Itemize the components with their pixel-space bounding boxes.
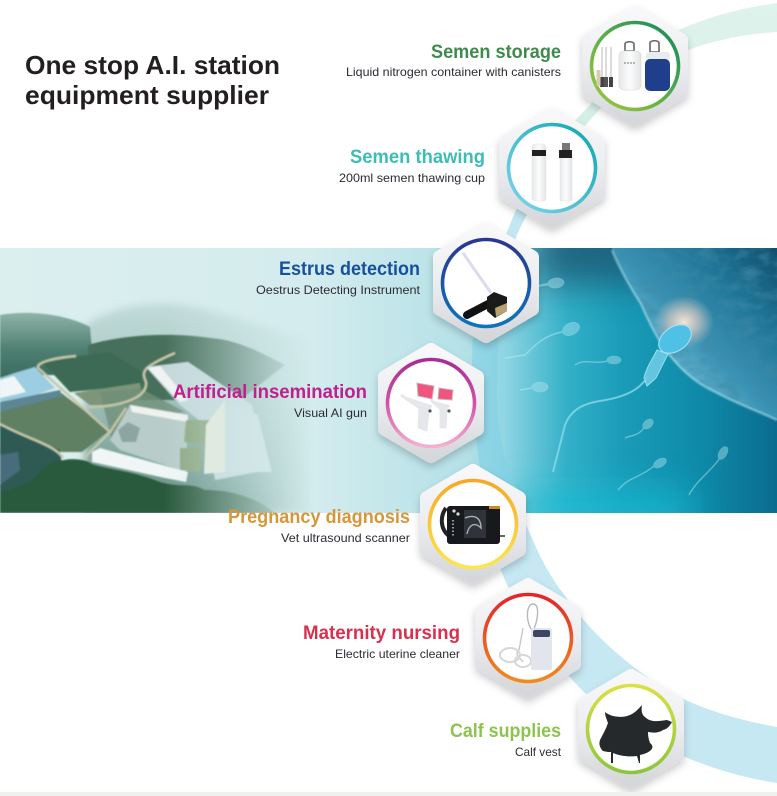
curved connector band (472, 3, 777, 783)
farm roads (0, 353, 175, 458)
icon: detector probe (463, 253, 507, 318)
label: Maternity nursing: Maternity nursing (303, 623, 460, 644)
label: Semen storage (346, 42, 561, 79)
icon: AI guns (401, 383, 453, 430)
item: Semen storage (346, 13, 681, 119)
title: equipment supplier (25, 80, 269, 110)
egg cell (612, 248, 777, 420)
small sperm swarm (505, 277, 730, 495)
item: Calf supplies (450, 676, 677, 782)
label: Calf supplies (450, 721, 562, 759)
label: Semen storage: Liquid nitrogen container with canisters (346, 65, 561, 79)
icon: blue container (645, 41, 670, 91)
icon: ultrasound scanner (442, 506, 505, 544)
main building complex (146, 362, 268, 480)
label: Calf supplies: Calf supplies (450, 721, 561, 742)
icon: white container (619, 42, 641, 90)
hexagon badge: thawing cups (506, 115, 598, 221)
forest foreground (0, 459, 275, 513)
label: Semen thawing: Semen thawing (350, 147, 485, 168)
label: Semen storage: Semen storage (431, 42, 561, 63)
item: Maternity nursing (303, 585, 574, 691)
hexagon badge: ultrasound scanner (427, 471, 519, 577)
hexagon badge: uterine cleaner (482, 585, 574, 691)
item: Semen thawing (339, 115, 598, 221)
label: Semen thawing (339, 147, 485, 185)
label: Estrus detection: Oestrus Detecting Instrument (256, 283, 421, 297)
item: Estrus detection (256, 230, 532, 336)
translucent band over banner (472, 335, 527, 513)
label: Maternity nursing: Electric uterine cleaner (335, 647, 460, 661)
banner photo background (0, 248, 777, 513)
hexagon badge: calf vest (585, 676, 677, 782)
label: Artificial insemination: Artificial insemination (173, 382, 367, 403)
icon: calf vest (599, 705, 672, 763)
label: Pregnancy diagnosis: Pregnancy diagnosis (228, 507, 410, 528)
title (25, 50, 280, 110)
bottom strip (0, 792, 777, 796)
label: Estrus detection (256, 259, 421, 297)
farm buildings left (0, 367, 55, 408)
icon: cup one (532, 144, 546, 201)
icon: uterine cleaner device (500, 604, 552, 670)
icon: cup two (559, 143, 572, 201)
label: Semen thawing: 200ml semen thawing cup (339, 171, 485, 185)
label: Artificial insemination (173, 382, 367, 420)
label: Estrus detection: Estrus detection (279, 259, 420, 280)
title: One stop A.I. station (25, 50, 280, 80)
label: Pregnancy diagnosis (228, 507, 410, 545)
main sperm (553, 319, 697, 472)
icon: canisters (596, 47, 613, 87)
item: Pregnancy diagnosis (228, 471, 519, 577)
item: Artificial insemination (173, 350, 477, 456)
label: Maternity nursing (303, 623, 460, 661)
label: Artificial insemination: Visual AI gun (294, 406, 367, 420)
hexagon badge: visual AI gun (385, 350, 477, 456)
aerial farm photo (0, 304, 330, 513)
hexagon badge: oestrus detecting instrument (440, 230, 532, 336)
label: Pregnancy diagnosis: Vet ultrasound scanner (281, 531, 410, 545)
label: Calf supplies: Calf vest (515, 745, 562, 759)
hexagon badge: liquid nitrogen containers (589, 13, 681, 119)
